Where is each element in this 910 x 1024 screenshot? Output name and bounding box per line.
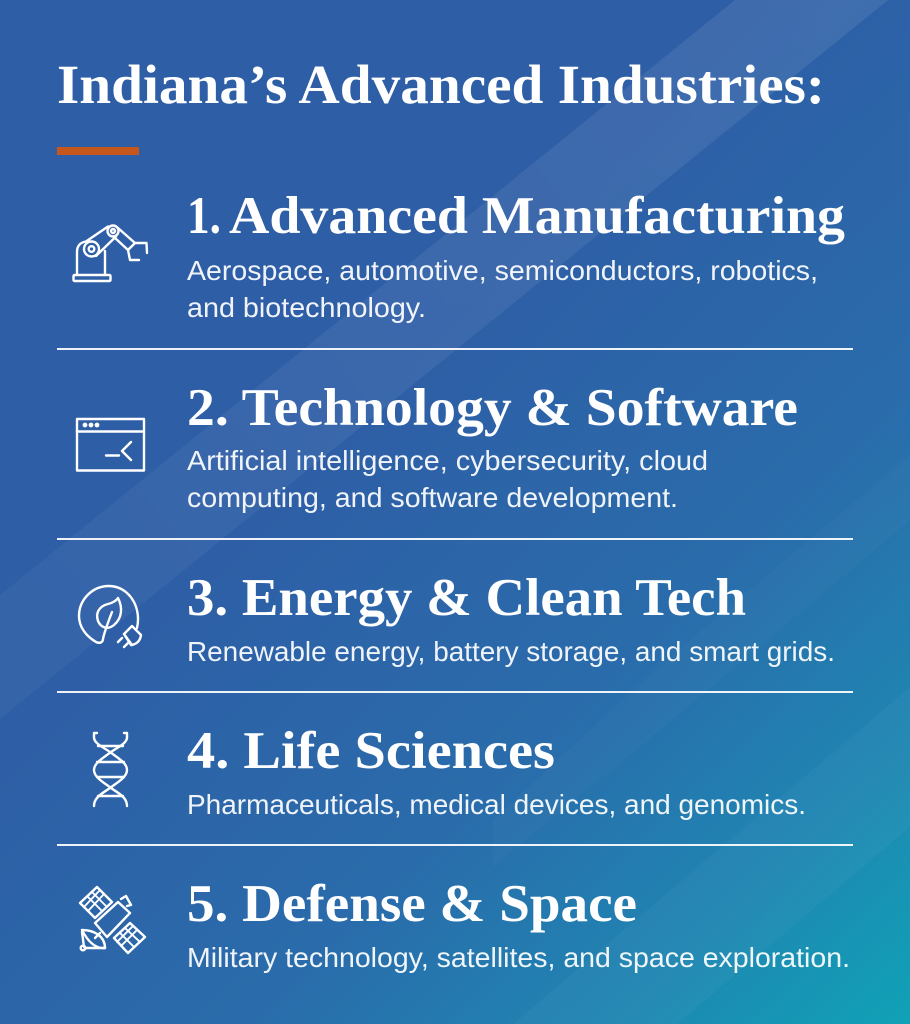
icon: robot arm [74,226,147,281]
icon: dna helix [94,733,127,806]
heading: 5. Defense & Space [187,875,637,933]
accent bar [57,147,139,155]
icon: satellite [80,887,145,953]
description: Aerospace, automotive, semiconductors, robotics, [187,255,818,286]
description: Renewable energy, battery storage, and smart grids. [187,636,835,667]
item 5: defense and space [80,875,850,973]
item 4: life sciences [94,722,806,820]
item 1: advanced manufacturing [74,187,845,323]
item 2: technology and software: computing, and software development. [187,482,678,513]
description: Artificial intelligence, cybersecurity, cloud [187,445,708,476]
icon: code window [77,419,144,470]
item 2: technology and software [77,379,798,513]
heading: Advanced Manufacturing [229,187,845,245]
heading: 3. Energy & Clean Tech [187,569,746,627]
item 3: energy and clean tech [79,569,835,667]
description: Military technology, satellites, and space exploration. [187,942,850,973]
icon: leaf plug [79,586,141,647]
heading: 2. Technology & Software [187,379,798,437]
description: Pharmaceuticals, medical devices, and genomics. [187,789,806,820]
heading: 1. [187,187,221,245]
title: Indiana’s Advanced Industries: [57,54,825,115]
heading: 4. Life Sciences [187,722,555,780]
item 1: advanced manufacturing: and biotechnology. [187,292,426,323]
